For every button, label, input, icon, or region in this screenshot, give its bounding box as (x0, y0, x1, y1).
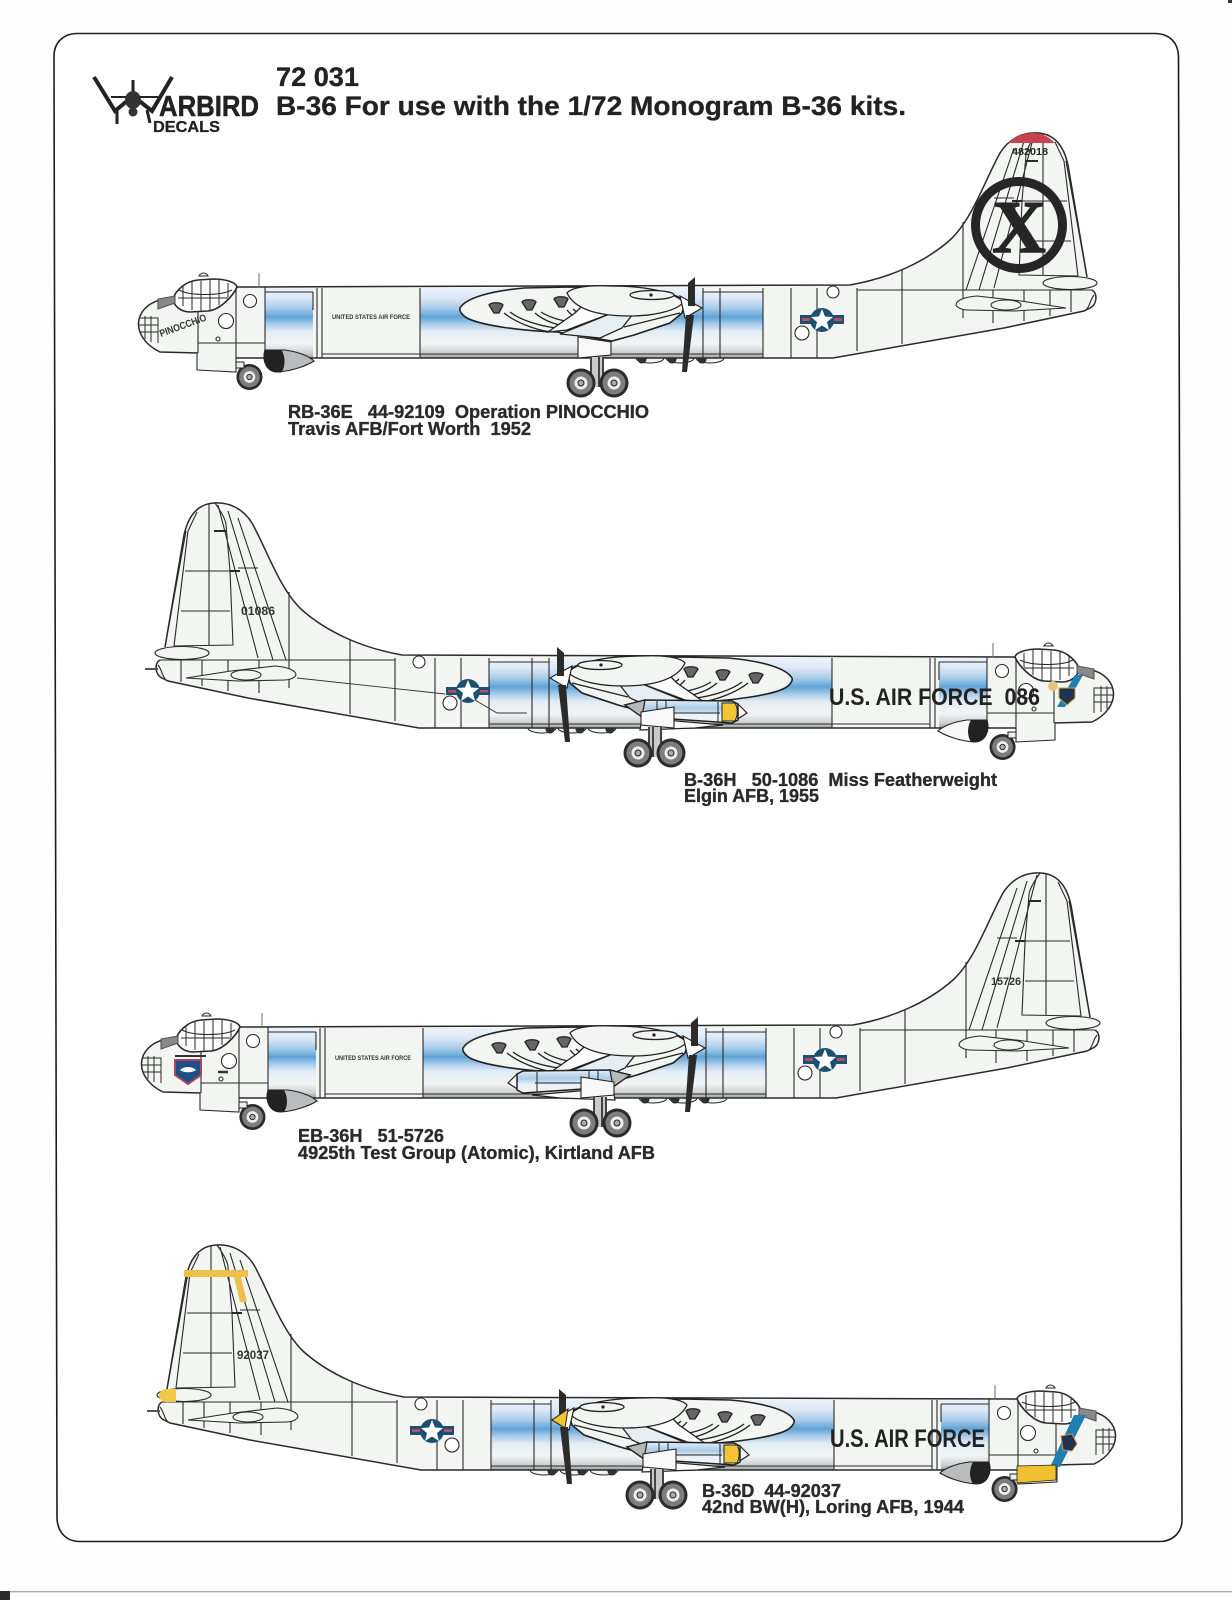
fin cap (1008, 133, 1055, 143)
national insignia (446, 679, 490, 703)
fuselage lettering: UNITED STATES AIR FORCE (335, 1055, 412, 1062)
fuselage lettering: U.S. AIR FORCE (830, 1425, 985, 1453)
fin marking X: X (992, 187, 1046, 269)
yellow bay door (1017, 1465, 1056, 1483)
caption: RB-36E: Travis AFB/Fort Worth 1952 (288, 419, 531, 439)
title: product number and description: 72 031 (276, 62, 359, 92)
fin number: 01086 (241, 604, 275, 618)
fin tail number: 482018 (1012, 147, 1048, 158)
logo: Warbird Decals: ARBIRD (159, 91, 259, 123)
stabilizer tip (159, 1389, 176, 1402)
caption: B-36H: B-36H 50-1086 Miss Featherweight (684, 770, 997, 790)
caption: B-36D: 42nd BW(H), Loring AFB, 1944 (702, 1497, 964, 1517)
caption: B-36H (684, 770, 997, 806)
nose stripe and badge (1050, 1415, 1086, 1467)
fin band (184, 1270, 248, 1302)
fin number: 15726 (991, 976, 1021, 988)
national insignia (410, 1419, 454, 1443)
radome (264, 350, 314, 372)
caption: B-36D: B-36D 44-92037 (702, 1481, 841, 1501)
caption: RB-36E: RB-36E 44-92109 Operation PINOCCHIO (288, 402, 649, 422)
logo: Warbird Decals: DECALS (153, 119, 220, 136)
fin marking X (976, 182, 1062, 269)
caption: B-36H: Elgin AFB, 1955 (684, 786, 819, 806)
national insignia (800, 308, 844, 332)
caption: EB-36H: 4925th Test Group (Atomic), Kirtland AFB (298, 1143, 655, 1163)
caption: EB-36H (298, 1126, 655, 1163)
aircraft: B-36D 42nd BW (147, 1245, 1116, 1510)
caption: EB-36H: EB-36H 51-5726 (298, 1126, 444, 1146)
aircraft: RB-36E Pinocchio (138, 133, 1097, 398)
fuselage lettering: U.S. AIR FORCE 086 (829, 684, 1040, 711)
title: product number and description (276, 62, 906, 121)
fuselage lettering: UNITED STATES AIR FORCE (332, 314, 411, 321)
aircraft: EB-36H (141, 873, 1100, 1138)
title: product number and description: B-36 For use with the 1/72 Monogram B-36 kits. (276, 91, 906, 121)
caption: RB-36E (288, 402, 649, 439)
nose badge (175, 1056, 228, 1084)
nose stripe and badge (1048, 675, 1083, 707)
caption: B-36D (702, 1481, 964, 1517)
fin number: 92037 (237, 1348, 269, 1362)
aircraft: B-36H Miss Featherweight (145, 503, 1114, 768)
logo: Warbird Decals (94, 77, 259, 136)
nose art: PINOCCHIO (158, 313, 208, 340)
national insignia (803, 1048, 847, 1072)
